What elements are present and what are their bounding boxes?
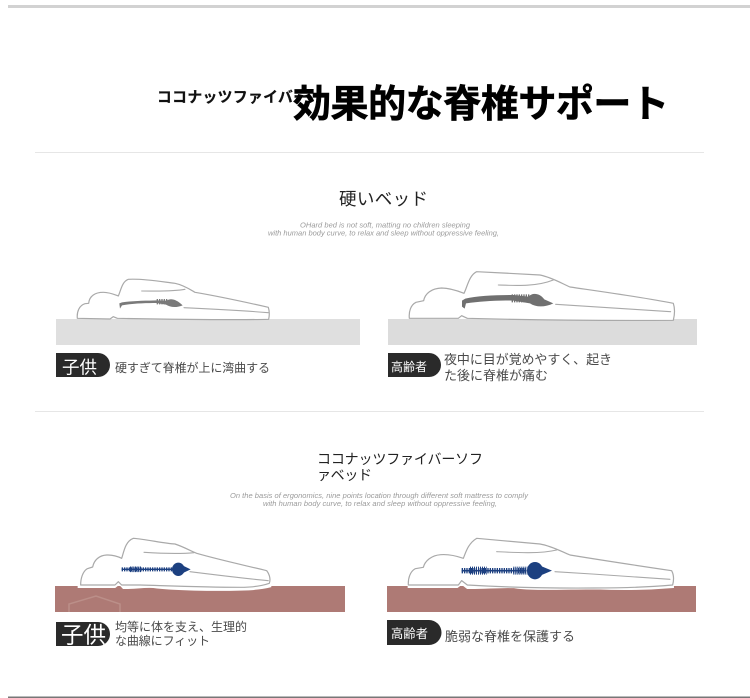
illustration: child on soft bed: [55, 538, 345, 612]
illustration: child on hard bed: [56, 279, 360, 345]
english description: soft bed: with human body curve, to relax and sleep without oppressive feeling,: [263, 499, 497, 508]
caption: child on hard bed: 硬すぎて脊椎が上に湾曲する: [115, 360, 270, 375]
english description: soft bed: [230, 491, 529, 508]
caption: senior on hard bed: 夜中に目が覚めやすく、起き: [444, 352, 612, 367]
caption: senior on hard bed: た後に脊椎が痛む: [444, 368, 548, 383]
label: senior: 高齢者: [391, 360, 427, 374]
heading: coconut fibre soft bed: ァベッド: [317, 467, 372, 483]
caption: child on soft bed: な曲線にフィット: [115, 633, 210, 648]
label: senior: [388, 353, 441, 377]
illustration: senior on hard bed: [388, 272, 697, 345]
panel: hard bed: [56, 189, 697, 383]
english description: hard bed: with human body curve, to relax and sleep without oppressive feeling,: [268, 228, 499, 238]
label: child: 子供: [62, 358, 97, 378]
title: 効果的な脊椎サポート: [293, 84, 669, 126]
english description: hard bed: [268, 220, 499, 238]
label: child: [56, 353, 110, 378]
heading: coconut fibre soft bed: [317, 451, 483, 483]
heading: coconut fibre soft bed: ココナッツファイバーソフ: [317, 451, 483, 467]
title: ココナッツファイバー: [157, 90, 308, 106]
english description: hard bed: OHard bed is not soft, matting no children sleeping: [300, 220, 471, 230]
illustration: senior on soft bed: [387, 538, 696, 612]
heading: hard bed: 硬いベッド: [339, 189, 428, 209]
caption: child on soft bed: 均等に体を支え、生理的: [115, 619, 247, 634]
english description: soft bed: On the basis of ergonomics, nine points location through different soft mattress to comply: [230, 491, 529, 500]
label: senior: [387, 620, 442, 645]
caption: senior on soft bed: 脆弱な脊椎を保護する: [445, 629, 575, 644]
caption: senior on hard bed: [444, 352, 612, 383]
panel: coconut fibre soft bed: [55, 451, 696, 648]
caption: child on soft bed: [115, 619, 247, 648]
label: child: 子供: [61, 623, 106, 648]
label: senior: 高齢者: [391, 627, 428, 641]
